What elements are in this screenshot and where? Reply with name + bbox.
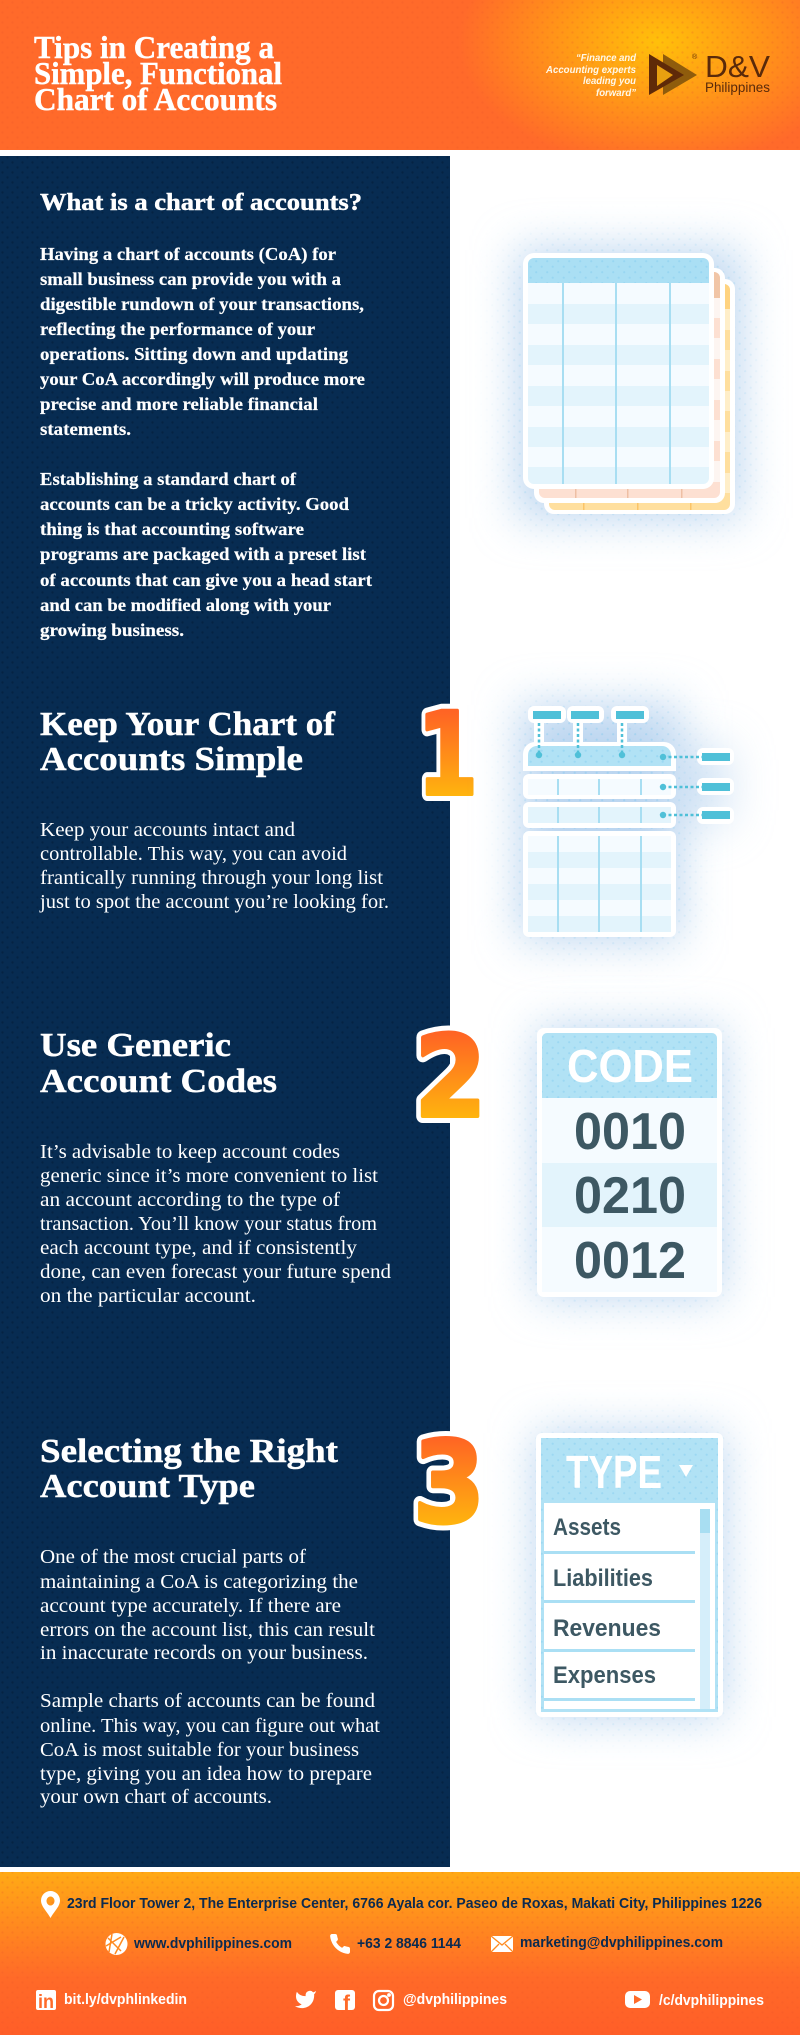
code rows: 0010: [574, 1103, 686, 1161]
logo: D&V Philippines: D&V: [705, 49, 770, 84]
illustration: code table: [508, 998, 752, 1329]
section 3 body paragraph 2: online. This way, you can figure out what: [40, 1715, 380, 1737]
section 2 heading: Account Codes: [40, 1063, 277, 1100]
text block: intro paragraph 2: [40, 469, 372, 640]
text block: intro paragraph 1: precise and more reliable financial: [40, 394, 318, 414]
dropdown list: Liabilities: [553, 1565, 653, 1592]
section 3 heading: Selecting the Right: [40, 1433, 339, 1470]
section 2 body text: on the particular account.: [40, 1285, 256, 1307]
section 3 body paragraph 2: type, giving you an idea how to prepare: [40, 1763, 372, 1785]
section 2 heading: Use Generic: [40, 1027, 231, 1064]
sheet: peach middle: [534, 268, 725, 503]
icon: linkedin: in: [38, 1992, 54, 2013]
number 2: 2: [414, 1013, 486, 1143]
number 2: 2: [414, 1013, 486, 1143]
title: Chart of Accounts: [34, 81, 277, 117]
icon: phone: [330, 1934, 350, 1954]
text block: intro paragraph 1: digestible rundown of your transactions,: [40, 294, 364, 314]
section 2 body text: done, can even forecast your future spend: [40, 1261, 391, 1283]
section 1 heading: [40, 706, 336, 778]
social handle: @dvphilippines: [403, 1991, 507, 2008]
code rows: [542, 1098, 717, 1292]
text block: intro paragraph 2: programs are packaged with a preset list: [40, 544, 366, 564]
text block: intro paragraph 2: accounts can be a tricky activity. Good: [40, 494, 349, 514]
footer band: [0, 1872, 800, 2035]
number 3: 3: [413, 1417, 485, 1549]
header row: [523, 723, 676, 771]
logo: D&V Philippines: ®: [692, 53, 698, 61]
logo: D&V Philippines: [649, 49, 770, 95]
section 2 body text: transaction. You’ll know your status from: [40, 1213, 377, 1235]
text block: intro paragraph 1: your CoA accordingly will produce more: [40, 369, 365, 389]
youtube handle: /c/dvphilippines: [659, 1992, 764, 2009]
tagline: [545, 52, 637, 99]
code header: CODE: [567, 1040, 693, 1092]
section 3 body paragraph 2: your own chart of accounts.: [40, 1786, 272, 1808]
text block: intro paragraph 2: and can be modified along with your: [40, 595, 331, 615]
dropdown list: Assets: [553, 1514, 621, 1541]
section 1 heading: Keep Your Chart of: [40, 706, 336, 743]
dropdown list: Revenues: [553, 1615, 661, 1642]
logo: D&V Philippines: Philippines: [705, 79, 770, 95]
website: www.dvphilippines.com: [133, 1935, 292, 1952]
illustration: table with tagged rows: [491, 673, 747, 972]
section 1 body text: Keep your accounts intact and: [40, 819, 295, 841]
tagline: “Finance and: [576, 52, 637, 64]
number 3: 3: [413, 1417, 485, 1549]
tagline: leading you: [583, 75, 637, 87]
phone number: +63 2 8846 1144: [357, 1935, 462, 1952]
section 3 body paragraph 2: [40, 1690, 380, 1808]
section 2 body text: each account type, and if consistently: [40, 1237, 357, 1259]
icon: instagram: [374, 1991, 393, 2010]
icon: mail: [491, 1936, 513, 1952]
sheet: yellow back: [544, 279, 735, 514]
section 1 body text: controllable. This way, you can avoid: [40, 843, 347, 865]
section 3 heading: [40, 1433, 339, 1505]
text block: intro paragraph 1: reflecting the performance of your: [40, 319, 315, 339]
section 2 body text: generic since it’s more convenient to list: [40, 1165, 378, 1187]
section 1 heading: Accounts Simple: [40, 741, 303, 778]
lower table: [523, 831, 676, 937]
section 3 body paragraph 1: maintaining a CoA is categorizing the: [40, 1571, 358, 1593]
section 3 body paragraph 1: account type accurately. If there are: [40, 1595, 341, 1617]
icon: facebook: [335, 1990, 355, 2015]
section 3 body paragraph 1: One of the most crucial parts of: [40, 1546, 306, 1568]
sheet: blue front: [523, 253, 714, 489]
linkedin handle: bit.ly/dvphlinkedin: [64, 1991, 187, 2008]
section 3 heading: Account Type: [40, 1468, 255, 1505]
text block: intro paragraph 1: Having a chart of accounts (CoA) for: [40, 244, 336, 265]
section 1 body text: just to spot the account you’re looking for.: [39, 891, 389, 913]
text block: intro paragraph 1: operations. Sitting down and updating: [40, 344, 348, 364]
section 2 body text: [40, 1141, 391, 1307]
icon: globe: [106, 1933, 128, 1955]
icon: location pin: [41, 1891, 60, 1918]
illustration: type dropdown: [508, 1404, 752, 1747]
section 3 body paragraph 2: Sample charts of accounts can be found: [40, 1690, 375, 1712]
code rows: 0012: [574, 1232, 686, 1290]
text block: intro paragraph 1: statements.: [40, 419, 131, 439]
section 2 body text: an account according to the type of: [40, 1189, 340, 1211]
middle rows: [523, 774, 676, 828]
navy content panel: [0, 156, 450, 1867]
section 3 body paragraph 1: [40, 1546, 375, 1664]
email: marketing@dvphilippines.com: [520, 1934, 723, 1951]
text block: intro paragraph 2: growing business.: [40, 620, 184, 640]
number 1: 1: [417, 688, 478, 821]
title: Simple, Functional: [34, 55, 282, 91]
dropdown list: Expenses: [553, 1662, 656, 1689]
tagline: forward”: [596, 87, 637, 99]
section 2 body text: It’s advisable to keep account codes: [40, 1141, 340, 1163]
icon: youtube: [625, 1991, 650, 2008]
header banner: [0, 0, 800, 150]
dropdown header: TYPE: [566, 1446, 662, 1498]
scrollbar: [700, 1509, 710, 1709]
code rows: 0210: [574, 1167, 686, 1225]
dropdown list: [544, 1503, 715, 1709]
text block: intro paragraph 2: of accounts that can give you a head start: [40, 570, 372, 590]
illustration: stacked account sheets: [486, 222, 768, 548]
text block: intro paragraph 2: thing is that accounting software: [40, 519, 304, 539]
top tags: [528, 706, 649, 746]
tagline: Accounting experts: [545, 64, 636, 76]
title: Tips in Creating a: [34, 29, 274, 65]
side tags: [660, 748, 734, 824]
text block: intro paragraph 1: small business can provide you with a: [40, 269, 341, 289]
icon: facebook: f: [343, 1992, 351, 2015]
section 1 body text: [39, 819, 389, 913]
section 3 body paragraph 1: in inaccurate records on your business.: [40, 1642, 368, 1664]
text block: intro paragraph 1: [40, 244, 365, 439]
section 3 body paragraph 2: CoA is most suitable for your business: [40, 1739, 359, 1761]
number 1: 1: [417, 688, 478, 821]
title: [34, 29, 282, 117]
text block: intro paragraph 2: Establishing a standard chart of: [40, 469, 297, 489]
section 3 body paragraph 1: errors on the account list, this can result: [40, 1619, 375, 1641]
section 2 heading: [40, 1027, 277, 1100]
heading: what is a chart of accounts: What is a chart of accounts?: [40, 190, 362, 216]
code header: [542, 1033, 717, 1098]
section 1 body text: frantically running through your long list: [40, 867, 383, 889]
icon: twitter: [295, 1991, 316, 2008]
address: 23rd Floor Tower 2, The Enterprise Center, 6766 Ayala cor. Paseo de Roxas, Makati City, Philippines 1226: [67, 1895, 762, 1912]
